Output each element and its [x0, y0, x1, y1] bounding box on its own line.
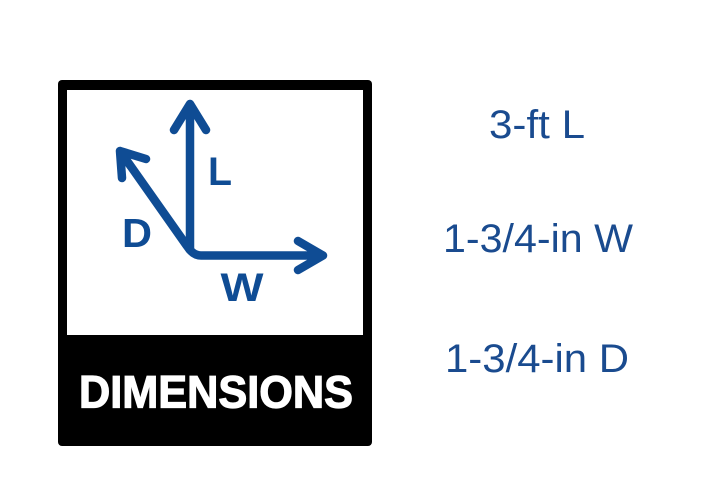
badge white area: [67, 90, 363, 335]
label: D: D: [122, 210, 152, 256]
text: length value: 3-ft L: [489, 103, 585, 147]
arrow: length: [174, 104, 206, 250]
heading: DIMENSIONS: DIMENSIONS: [79, 366, 353, 418]
label: L: L: [208, 150, 232, 194]
text: depth value: 1-3/4-in D: [445, 337, 629, 381]
panel: dimensions badge: [58, 80, 372, 446]
arrow: width and depth joined at corner: [120, 151, 323, 270]
label: W: W: [220, 266, 264, 310]
text: width value: 1-3/4-in W: [443, 217, 634, 261]
icon: dimension arrows: [120, 104, 323, 270]
badge black frame: [58, 80, 372, 446]
